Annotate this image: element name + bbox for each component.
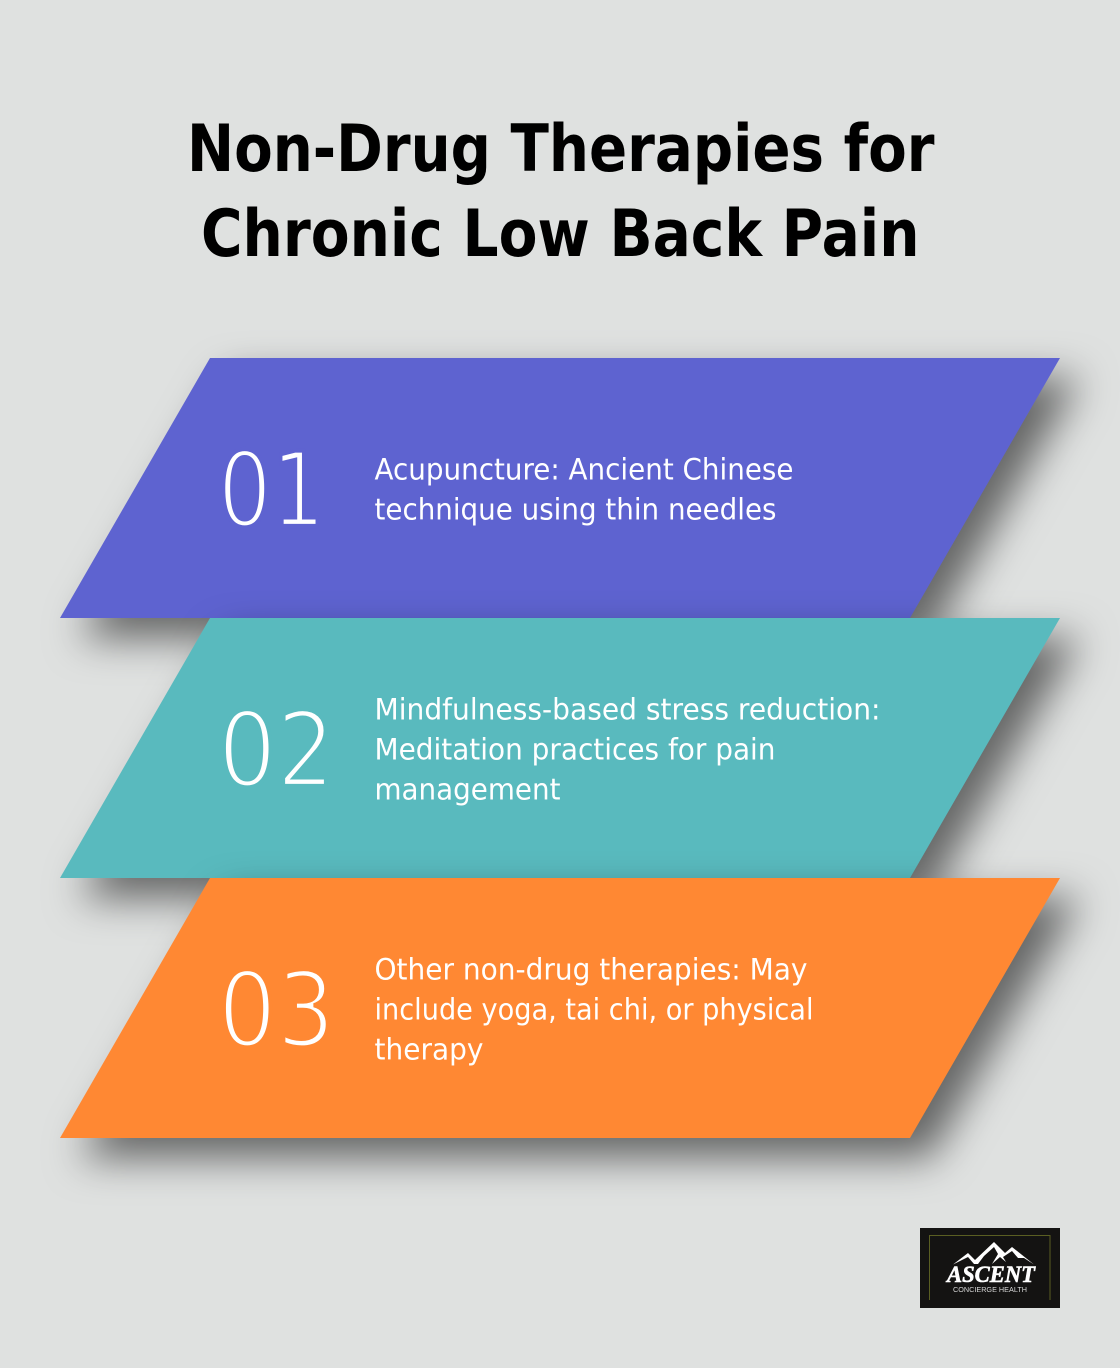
text: mindfulness: Meditation practices for pain [374, 732, 776, 766]
number 03: 03 [218, 951, 335, 1071]
band: orange [60, 878, 1060, 1138]
text: mindfulness [374, 692, 880, 806]
logo: Ascent Concierge Health [920, 1228, 1060, 1308]
text: acupuncture [374, 452, 794, 526]
band: teal [60, 618, 1060, 878]
text: acupuncture: technique using thin needles [374, 492, 776, 526]
title [187, 112, 934, 272]
icon: mountains [953, 1242, 1034, 1264]
text: other therapies [374, 952, 814, 1066]
panel: 03 other therapies [60, 878, 1060, 1138]
text: mindfulness: management [374, 772, 560, 806]
panel: 02 mindfulness [60, 618, 1060, 878]
text: other therapies: therapy [374, 1032, 484, 1066]
logo wordmark: ASCENT [945, 1262, 1036, 1287]
text: other therapies: include yoga, tai chi, or physical [374, 992, 814, 1026]
text: mindfulness: Mindfulness-based stress reduction: [374, 692, 880, 726]
title: Non-Drug Therapies for [187, 112, 934, 187]
title: Chronic Low Back Pain [201, 197, 920, 272]
text: other therapies: Other non-drug therapies: May [374, 952, 808, 986]
text: acupuncture: Acupuncture: Ancient Chinese [374, 452, 794, 486]
band: purple [60, 358, 1060, 618]
logo subtitle: CONCIERGE HEALTH [953, 1287, 1027, 1294]
number 02: 02 [218, 691, 335, 811]
panel: 01 acupuncture [60, 358, 1060, 618]
number 01: 01 [218, 431, 325, 551]
